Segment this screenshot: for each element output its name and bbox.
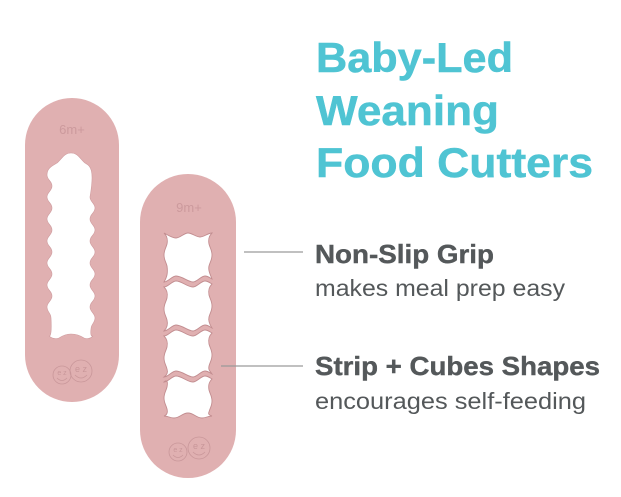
title: Weaning [316,87,499,134]
title [316,34,593,186]
title: Baby-Led [316,34,513,81]
logo: ez faces: e z [193,441,205,451]
strip-shaped opening [47,153,95,339]
callout: strip + cubes shapes [221,351,600,414]
leader line to cubes [221,365,303,367]
cutter: 9m+ cubes [140,174,236,478]
age label 9m+: 9m+ [176,200,202,215]
callout heading: Strip + Cubes Shapes [315,351,600,381]
callout text: makes meal prep easy [315,275,566,301]
logo: ez faces: e z [75,364,87,374]
callout: non-slip grip [244,239,566,301]
cube-shaped opening 2 [164,281,212,331]
logo: ez faces: e z [173,447,183,454]
cube-shaped opening 4 [164,376,212,418]
cube-shaped opening 1 [164,233,212,282]
logo: ez faces: e z [57,370,67,377]
age label 6m+: 6m+ [59,122,85,137]
logo: ez faces [169,437,210,461]
logo: ez faces [53,360,92,384]
cube-shaped opening 3 [164,330,212,377]
callout heading: Non-Slip Grip [315,239,494,269]
title: Food Cutters [316,139,593,186]
callout text: encourages self-feeding [315,388,586,414]
cutter: 6m+ strip [25,98,119,402]
leader line to grip [244,251,303,253]
